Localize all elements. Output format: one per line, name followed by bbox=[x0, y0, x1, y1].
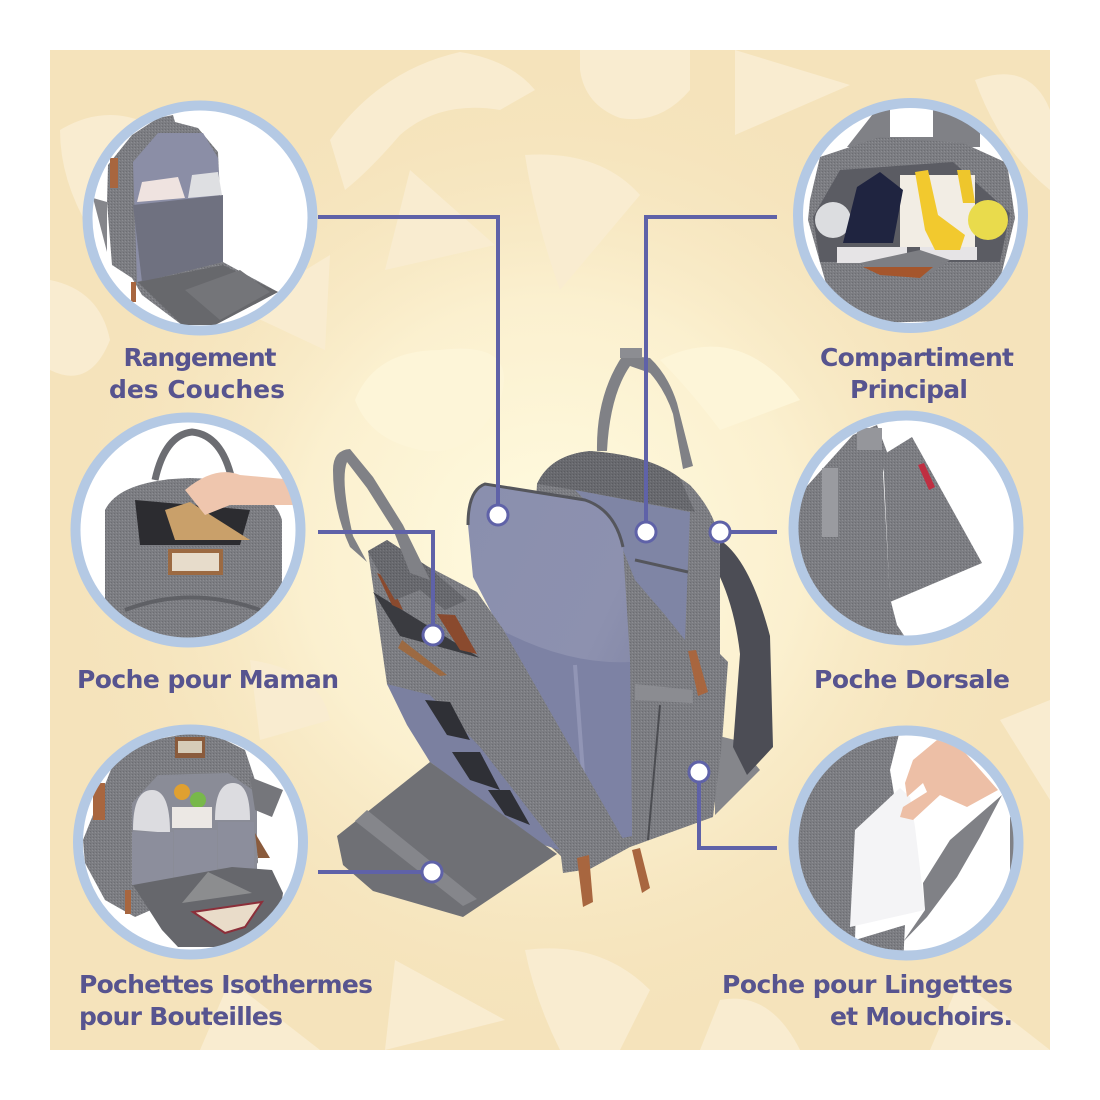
label: Compartiment Principal: Compartiment bbox=[820, 343, 1014, 372]
pocket opening bbox=[373, 592, 480, 658]
handle clip bbox=[620, 348, 642, 358]
connector: insulated pouches bbox=[318, 870, 432, 874]
circle: main compartment bbox=[798, 103, 1023, 328]
label: Pochettes Isothermes pour Bouteilles: Pochettes Isothermes bbox=[79, 970, 373, 999]
front section fabric bbox=[368, 540, 623, 858]
bottle tops bbox=[425, 700, 530, 825]
circle: diaper storage bbox=[88, 106, 312, 330]
circle: back pocket bbox=[790, 416, 1018, 640]
connector: back pocket bbox=[720, 530, 777, 534]
brand label bbox=[398, 640, 447, 676]
circle: wipes pocket bbox=[790, 730, 1018, 965]
top dark fabric bbox=[537, 451, 695, 512]
elastic pocket bbox=[505, 632, 632, 839]
leather trim bbox=[377, 573, 477, 654]
central backpack illustration bbox=[333, 348, 773, 917]
upper pocket fabric bbox=[368, 540, 467, 610]
connector: diaper storage bbox=[318, 217, 498, 515]
circle: mum pocket bbox=[76, 418, 300, 650]
connector: main compartment bbox=[646, 217, 777, 532]
flap rim bbox=[468, 484, 623, 547]
mesh zipper band bbox=[355, 810, 477, 906]
zipper pull right bbox=[632, 848, 650, 893]
pocket fold bbox=[575, 665, 585, 800]
circle: bottle pouches bbox=[78, 730, 303, 954]
side pocket seam bbox=[648, 705, 660, 840]
label: Poche pour Maman: Poche pour Maman bbox=[77, 665, 339, 694]
zipper pull left bbox=[577, 855, 593, 907]
label: Poche pour Lingettes et Mouchoirs.: Poche pour Lingettes bbox=[722, 970, 1013, 999]
label: Poche pour Lingettes et Mouchoirs.: et Mouchoirs. bbox=[830, 1002, 1013, 1031]
backpack body bbox=[530, 451, 728, 873]
lower back strap bbox=[715, 735, 760, 815]
side pocket strap bbox=[635, 684, 693, 703]
connector: mum pocket bbox=[318, 532, 433, 635]
front handle bbox=[333, 449, 430, 580]
back strap bbox=[720, 540, 773, 775]
label: Poche Dorsale: Poche Dorsale bbox=[814, 665, 1010, 694]
big flap lining bbox=[468, 484, 632, 839]
mesh pocket flap bbox=[337, 762, 557, 917]
top handle bbox=[597, 355, 693, 469]
side zipper pull bbox=[688, 650, 708, 696]
connector: wipes pocket bbox=[699, 772, 777, 848]
bottle pouch interior bbox=[387, 684, 560, 850]
label: Rangement des Couches: des Couches bbox=[109, 375, 285, 404]
compartment pocket edge bbox=[635, 560, 688, 572]
label: Rangement des Couches: Rangement bbox=[124, 343, 277, 372]
interior compartment bbox=[575, 490, 690, 640]
dots bbox=[422, 505, 730, 882]
label: Pochettes Isothermes pour Bouteilles: pour Bouteilles bbox=[79, 1002, 283, 1031]
label: Compartiment Principal: Principal bbox=[850, 375, 968, 404]
